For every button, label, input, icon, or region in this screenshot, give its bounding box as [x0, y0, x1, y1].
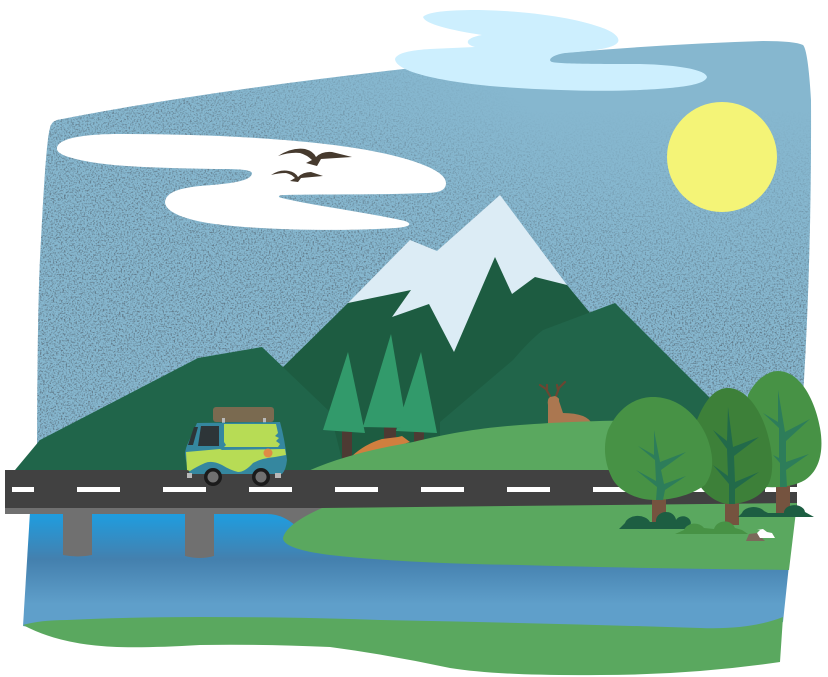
crown [697, 388, 772, 504]
white cloud [57, 134, 446, 230]
trunk [725, 502, 739, 525]
sun [667, 102, 777, 212]
grassy hill [308, 420, 700, 472]
rock [746, 533, 765, 541]
trunks [342, 425, 424, 460]
bumpers [187, 473, 281, 478]
road surface [5, 470, 797, 508]
left hill [15, 347, 345, 472]
middle bush [675, 521, 748, 534]
conifers [323, 334, 437, 433]
roof rack [213, 407, 274, 422]
front wheel [204, 468, 222, 486]
trunk [652, 498, 666, 523]
rabbit and rock [746, 529, 775, 541]
bridge road [5, 470, 797, 558]
rabbit [757, 529, 775, 538]
middle tree [697, 388, 772, 525]
right tree [748, 371, 821, 513]
branches [763, 390, 810, 487]
main mountain [240, 240, 650, 470]
van body [185, 422, 287, 474]
mountain range [15, 195, 712, 472]
branches [636, 430, 686, 500]
rack posts [222, 418, 266, 424]
left bush [619, 512, 692, 529]
deer [540, 382, 592, 424]
right mountain [440, 303, 712, 440]
bushes [619, 505, 814, 534]
birds [271, 149, 352, 182]
deer body [548, 396, 592, 424]
rear wheel [252, 468, 270, 486]
crown [605, 397, 712, 500]
river [23, 512, 789, 640]
lane markings [12, 487, 797, 492]
van [185, 407, 287, 486]
large bird [278, 149, 352, 166]
bridge deck underside [5, 506, 330, 530]
antlers [540, 382, 565, 396]
lime paint [224, 424, 280, 447]
conifer trees [323, 334, 437, 460]
windows [198, 426, 219, 446]
snow cap [348, 195, 567, 352]
pale blue cloud [395, 10, 707, 91]
small bird [271, 170, 323, 182]
orange flower [264, 448, 272, 458]
trunk [776, 484, 790, 513]
left tree [605, 397, 712, 523]
near river bank [283, 503, 797, 570]
branches [713, 407, 759, 504]
crown [748, 371, 821, 487]
fox [352, 436, 410, 458]
right bush [738, 505, 814, 517]
foreground grass [23, 617, 783, 675]
sky panel [37, 41, 812, 444]
bridge pillars [63, 512, 214, 558]
